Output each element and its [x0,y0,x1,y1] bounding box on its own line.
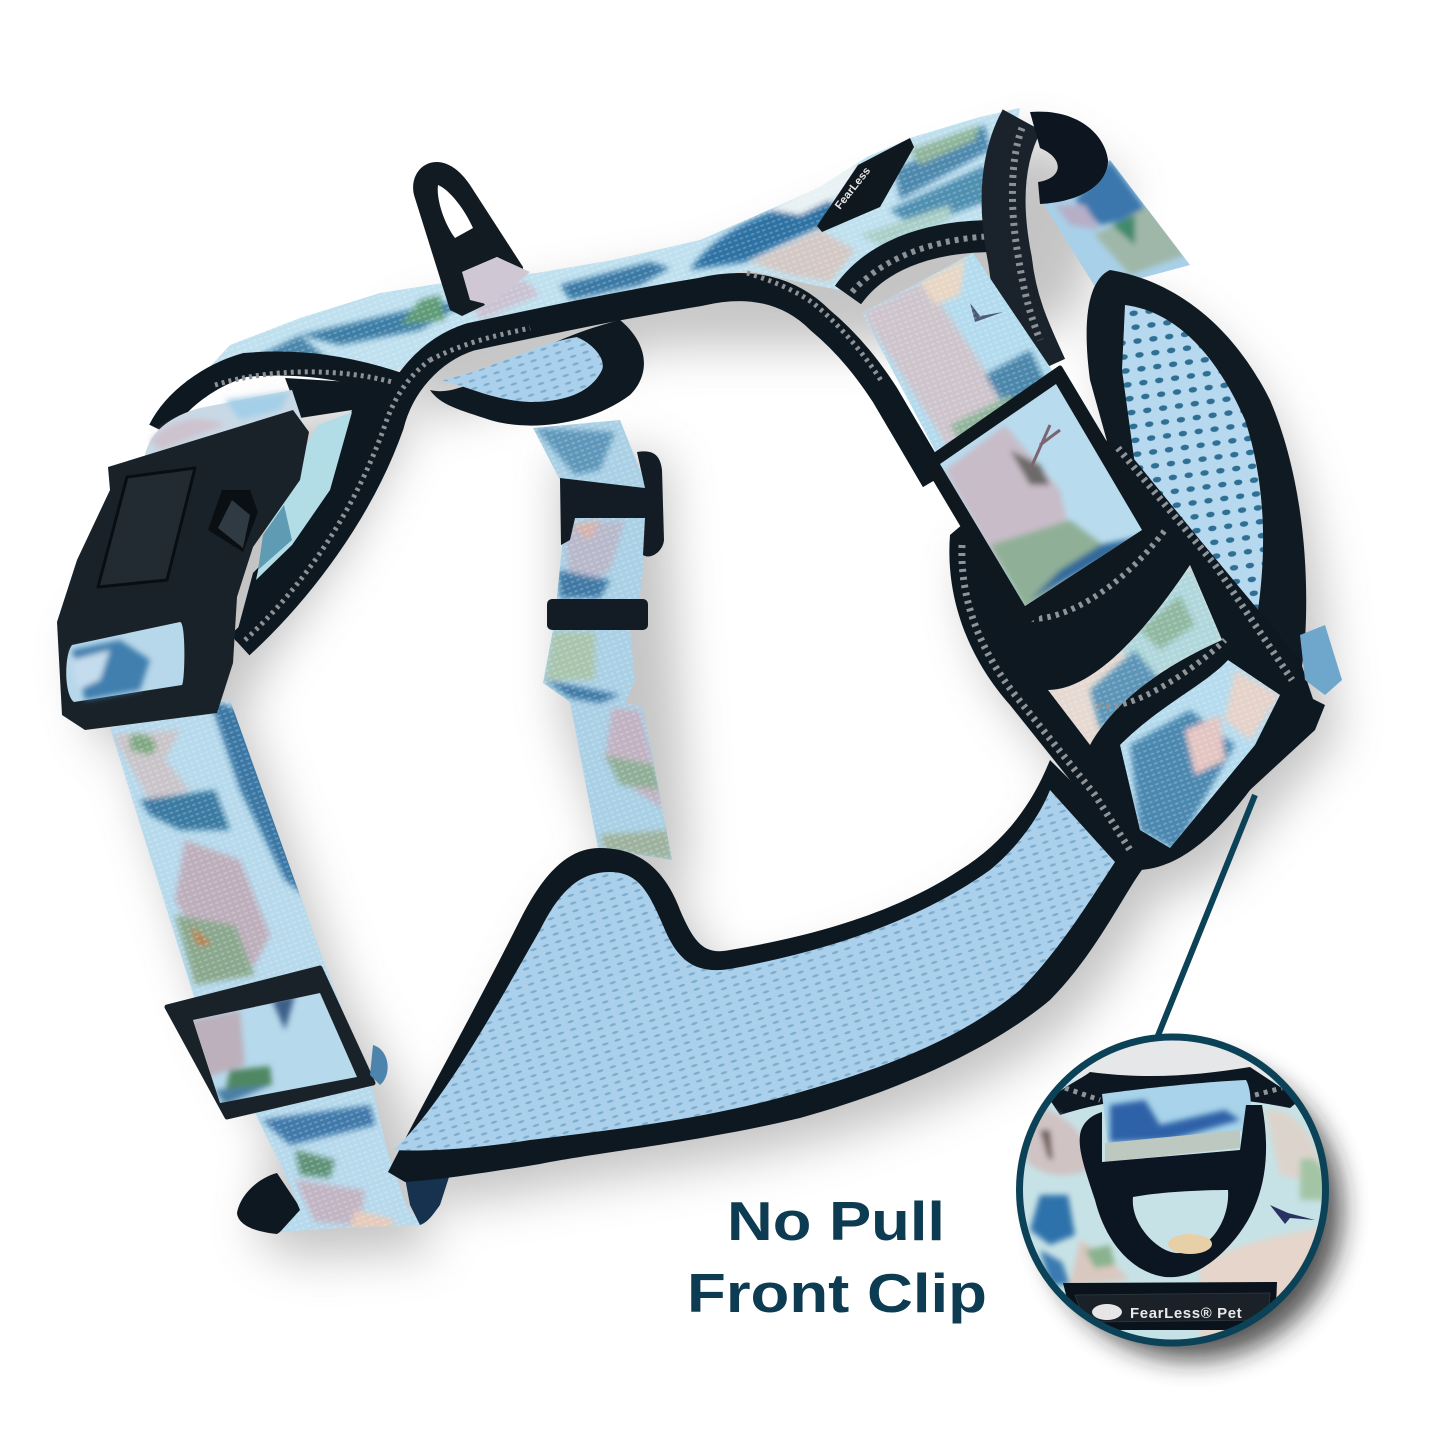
top-left binding [160,364,400,650]
stitched band b [1098,640,1225,706]
peach spot [1168,1234,1212,1254]
window binding [240,273,935,645]
top body band [210,108,1020,370]
woven label: FearLess® Pet [1130,1305,1242,1322]
lower slider [167,968,388,1117]
right mesh pad [1087,270,1306,696]
stitched band a [1022,530,1165,619]
far strap slider [560,451,664,557]
chest panel [388,760,1150,1225]
brand tag [817,138,914,232]
brand tag: FearLess [833,165,873,212]
dark wedge behind buckle [235,378,400,650]
pad mesh [1122,305,1263,645]
fabric hills [1025,1105,1330,1350]
left mesh lobe [430,320,644,426]
far strap middle [533,420,672,860]
bird [1270,1205,1315,1224]
far strap top right [1044,160,1190,286]
line 1: No Pull [727,1190,945,1252]
woven label [1063,1282,1277,1330]
right arc binding [848,236,1000,295]
handle webbing [462,257,530,305]
buckle roller webbing [66,622,184,702]
strap behind buckle [145,390,302,475]
side release buckle [57,410,309,730]
binding stitching [1065,1088,1282,1100]
shoulder slider [925,368,1158,625]
vertical shoulder binding [1004,120,1045,368]
lower print a [1048,565,1222,745]
navy fold under strap [405,1174,450,1225]
handle ring [413,162,530,316]
slider tail [370,1045,388,1085]
grey surface [1072,1040,1274,1080]
line 2: Front Clip [687,1262,987,1324]
top right black cap [1030,112,1108,204]
caption [687,1190,987,1324]
reflective stitching outer [962,448,1292,850]
chest mesh [393,790,1115,1151]
callout ring [1020,1037,1326,1343]
strap roll [1102,1080,1251,1162]
callout shadow [1042,1060,1342,1360]
neck panel [949,430,1315,870]
callout line [1157,795,1255,1038]
front ring and tail [1250,625,1342,790]
front D-ring [1080,1105,1266,1277]
drop shadow [78,134,1338,1258]
buckle press panel [98,468,195,587]
harness [57,100,1342,1240]
buckle window [208,490,258,552]
far strap loop [547,599,648,630]
lower print b [1120,660,1280,848]
black binding [1050,1067,1300,1115]
left lower strap [110,700,423,1234]
left chest fabric [256,410,352,582]
callout magnifier [1015,1030,1331,1350]
shoulder strap [862,253,1052,452]
